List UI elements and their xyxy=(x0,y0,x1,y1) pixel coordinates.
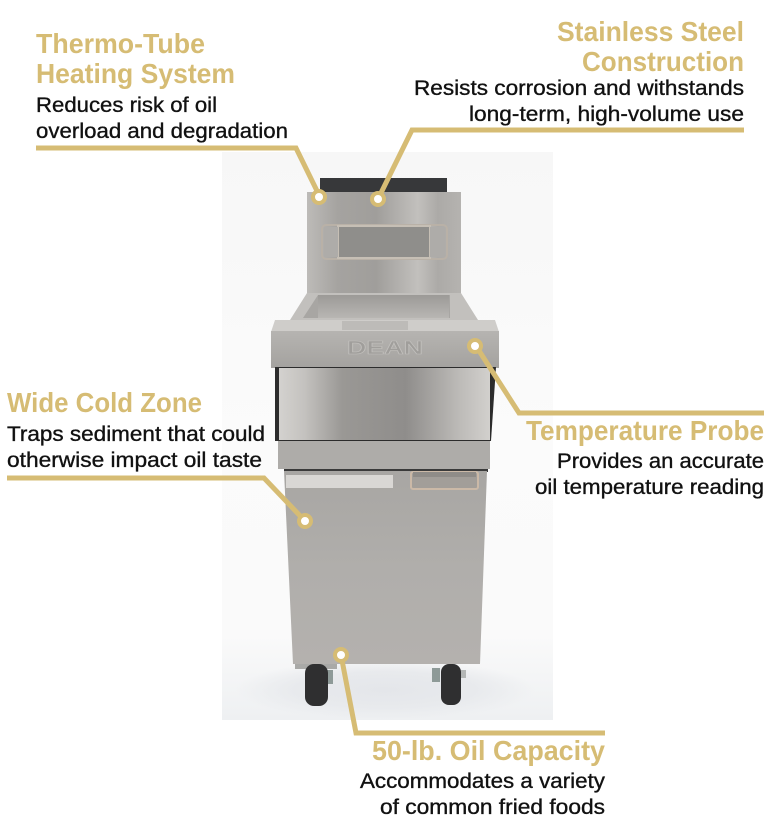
marker xyxy=(335,649,347,661)
callout: wide cold zone xyxy=(7,387,311,527)
heading: Construction xyxy=(582,46,744,77)
brand name: DEAN xyxy=(347,338,423,358)
cabinet door xyxy=(284,471,487,664)
basket hanger xyxy=(322,225,447,259)
left caster xyxy=(295,664,337,706)
description: oil temperature reading xyxy=(535,476,764,499)
callout: temperature probe xyxy=(469,340,764,499)
cabinet shadow xyxy=(284,469,488,472)
marker xyxy=(469,340,481,352)
description: Traps sediment that could xyxy=(7,423,265,446)
marker xyxy=(372,193,384,205)
heading: Wide Cold Zone xyxy=(7,387,202,418)
marker xyxy=(313,191,325,203)
heading: Stainless Steel xyxy=(557,16,744,47)
description: Accommodates a variety xyxy=(360,770,606,793)
heading: Thermo-Tube xyxy=(36,28,205,59)
photo: fryer xyxy=(222,152,553,720)
leader line xyxy=(476,346,764,413)
description: Provides an accurate xyxy=(557,450,764,473)
callout: thermo-tube heating system xyxy=(36,28,325,203)
callout: 50-lb oil capacity xyxy=(335,649,606,819)
front ledge xyxy=(271,320,499,332)
heading: 50-lb. Oil Capacity xyxy=(372,735,605,766)
ledge highlight xyxy=(342,321,408,330)
description: long-term, high-volume use xyxy=(469,103,744,126)
marker xyxy=(299,515,311,527)
description: Resists corrosion and withstands xyxy=(414,77,744,100)
leader line xyxy=(341,655,605,733)
fryer recess xyxy=(275,367,496,441)
control panel band xyxy=(271,331,499,368)
fryer door upper panel xyxy=(279,368,490,440)
lower band xyxy=(278,441,490,469)
description: Reduces risk of oil xyxy=(36,94,217,117)
callout: stainless steel construction xyxy=(372,16,744,205)
leader line xyxy=(7,478,305,521)
photo background xyxy=(222,152,553,720)
fryer flue top xyxy=(320,178,447,193)
right caster xyxy=(432,664,466,705)
door handle xyxy=(411,472,478,489)
description: of common fried foods xyxy=(380,796,605,819)
fry pot xyxy=(290,293,478,320)
floor shadow xyxy=(235,660,535,720)
warning label xyxy=(286,475,393,488)
leader line xyxy=(378,130,744,199)
heading: Heating System xyxy=(36,58,235,89)
description: otherwise impact oil taste xyxy=(7,449,262,472)
backsplash xyxy=(307,192,461,294)
description: overload and degradation xyxy=(36,120,288,143)
leader line xyxy=(36,148,320,197)
